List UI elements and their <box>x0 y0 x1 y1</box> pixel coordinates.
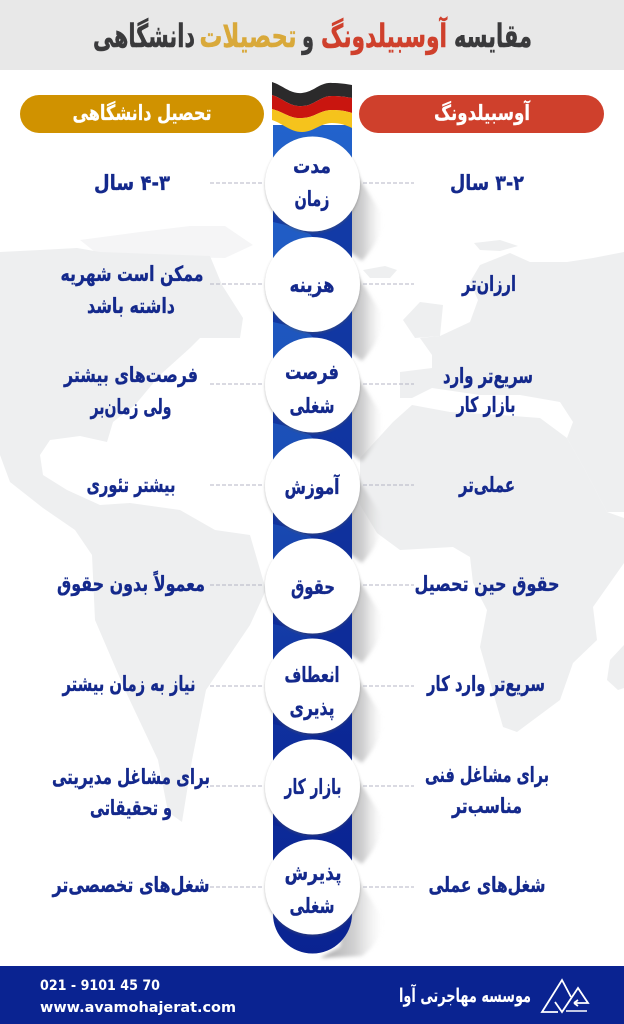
logo <box>542 980 588 1012</box>
row 3: job opportunity: فرصت <box>285 360 339 384</box>
dashed connector lines <box>210 183 414 887</box>
row 1: duration <box>94 136 524 232</box>
row 1: duration: ۳-۲ سال <box>450 171 524 195</box>
row 6: flexibility: سریع‌تر وارد کار <box>426 672 545 696</box>
row 1: duration: مدت <box>293 154 331 178</box>
title: تحصیلات <box>200 17 296 55</box>
flag of Germany <box>272 82 352 132</box>
row 2: cost: ممکن است شهریه <box>60 262 204 286</box>
bar wedges <box>273 210 352 861</box>
title: مقایسه <box>454 17 532 55</box>
row 7: job market: برای مشاغل مدیریتی <box>52 765 210 789</box>
row 2: cost: ارزان‌تر <box>461 272 516 296</box>
row 1: duration: ۴-۳ سال <box>94 171 170 195</box>
row 3: job opportunity: ولی زمان‌بر <box>90 395 172 419</box>
row 3: job opportunity: فرصت‌های بیشتر <box>63 363 198 387</box>
row 3: job opportunity: شغلی <box>290 394 334 418</box>
row 3: job opportunity: بازار کار <box>456 393 516 417</box>
institute name: موسسه مهاجرتی آوا <box>399 983 531 1007</box>
row 8: employment: پذیرش <box>284 861 342 885</box>
row 5: salary: معمولاً بدون حقوق <box>57 570 205 596</box>
row 7: job market: بازار کار <box>284 775 342 799</box>
header pill: university <box>20 95 264 133</box>
row 8: employment <box>52 840 546 934</box>
phone number: 021 - 9101 45 70 <box>40 978 160 994</box>
title: آوسبیلدونگ <box>321 16 448 55</box>
header pill: university: تحصیل دانشگاهی <box>72 100 212 125</box>
row 6: flexibility: انعطاف <box>284 663 340 687</box>
header band <box>0 0 624 70</box>
header pill: ausbildung <box>359 95 604 133</box>
row 2: cost: هزینه <box>290 273 334 297</box>
row 3: job opportunity <box>63 338 533 432</box>
row 6: flexibility: پذیری <box>290 696 334 720</box>
long shadows <box>320 164 383 958</box>
row 4: education: آموزش <box>284 474 340 499</box>
row 7: job market: مناسب‌تر <box>451 794 522 818</box>
row 7: job market: برای مشاغل فنی <box>425 763 549 787</box>
row 7: job market: و تحقیقاتی <box>90 796 172 820</box>
row 2: cost <box>60 237 516 332</box>
central vertical bar <box>273 125 352 953</box>
world map background <box>0 226 624 822</box>
row 2: cost: داشته باشد <box>87 294 175 318</box>
row 1: duration: زمان <box>294 187 330 211</box>
website: www.avamohajerat.com <box>40 1000 236 1016</box>
row 5: salary <box>57 538 560 634</box>
row 4: education: بیشتر تئوری <box>86 473 176 497</box>
row 6: flexibility: نیاز به زمان بیشتر <box>62 672 195 696</box>
row 5: salary: حقوق حین تحصیل <box>414 572 560 596</box>
row 8: employment: شغل‌های تخصصی‌تر <box>52 873 210 897</box>
title <box>93 16 532 55</box>
row 5: salary: حقوق <box>291 575 335 599</box>
footer <box>0 966 624 1024</box>
row 4: education: عملی‌تر <box>458 473 515 497</box>
row 6: flexibility <box>62 638 545 734</box>
row 7: job market <box>52 740 549 834</box>
title: و <box>301 17 314 55</box>
header pill: ausbildung: آوسبیلدونگ <box>434 100 531 125</box>
row 8: employment: شغل‌های عملی <box>428 873 546 897</box>
row 4: education <box>86 438 515 534</box>
row 3: job opportunity: سریع‌تر وارد <box>443 364 533 388</box>
title: دانشگاهی <box>93 17 195 55</box>
row 8: employment: شغلی <box>290 894 334 918</box>
